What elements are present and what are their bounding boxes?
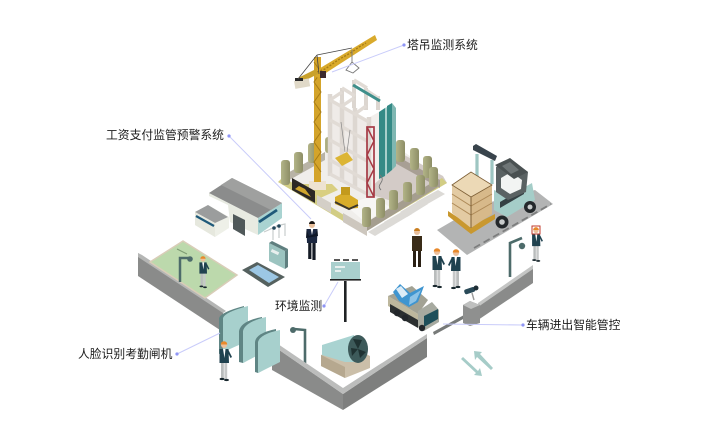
- leader line: payroll monitoring: [227, 134, 311, 219]
- traffic direction arrows: [461, 351, 493, 376]
- site sign and front fence: [292, 167, 438, 236]
- label: vehicle access control: 车辆进出智能管控: [526, 318, 621, 332]
- person: worker with face box: [532, 226, 543, 262]
- gate camera: [464, 286, 478, 300]
- person: brown suit manager: [412, 228, 422, 267]
- leader line: environment monitoring: [322, 282, 338, 308]
- ventilation fan unit: [321, 335, 370, 378]
- label: tower crane monitoring: 塔吊监测系统: [407, 38, 478, 52]
- pipes and control cabinet: [264, 224, 288, 269]
- wall: left perimeter: [138, 253, 226, 332]
- forklift platform: [437, 190, 553, 255]
- tower crane: [294, 35, 377, 199]
- wall: entrance right: [463, 265, 533, 326]
- person: suited manager: [306, 221, 318, 260]
- wall: lower perimeter: [272, 334, 427, 410]
- warehouse: [195, 178, 282, 237]
- pond: [242, 262, 285, 287]
- forklift: [473, 144, 536, 228]
- construction site ground: [278, 125, 447, 236]
- barrier arm: [433, 315, 465, 335]
- lamp post on right wall: [510, 238, 525, 277]
- label: environment monitoring: 环境监测: [275, 299, 322, 313]
- people: workers shaking hands: [432, 248, 460, 289]
- leader line: face attendance: [175, 333, 220, 356]
- wooden pallet crate: [448, 172, 495, 234]
- leader line: vehicle control: [443, 323, 525, 327]
- building frame: [328, 80, 396, 197]
- label: face attendance gate: 人脸识别考勤闸机: [78, 347, 173, 361]
- person: lawn worker: [199, 256, 209, 288]
- lamp post by gate: [290, 327, 305, 363]
- dump truck with blue cargo: [388, 284, 439, 331]
- billboard: [330, 260, 361, 322]
- lawn with lamp post: [150, 241, 237, 298]
- label: payroll monitoring: 工资支付监管预警系统: [106, 128, 224, 142]
- person: gate worker: [220, 341, 232, 381]
- bulldozer: [335, 187, 358, 209]
- face recognition gates: [219, 306, 280, 373]
- site fence: back pillars and panels: [281, 137, 440, 188]
- leader line: tower crane: [332, 43, 406, 72]
